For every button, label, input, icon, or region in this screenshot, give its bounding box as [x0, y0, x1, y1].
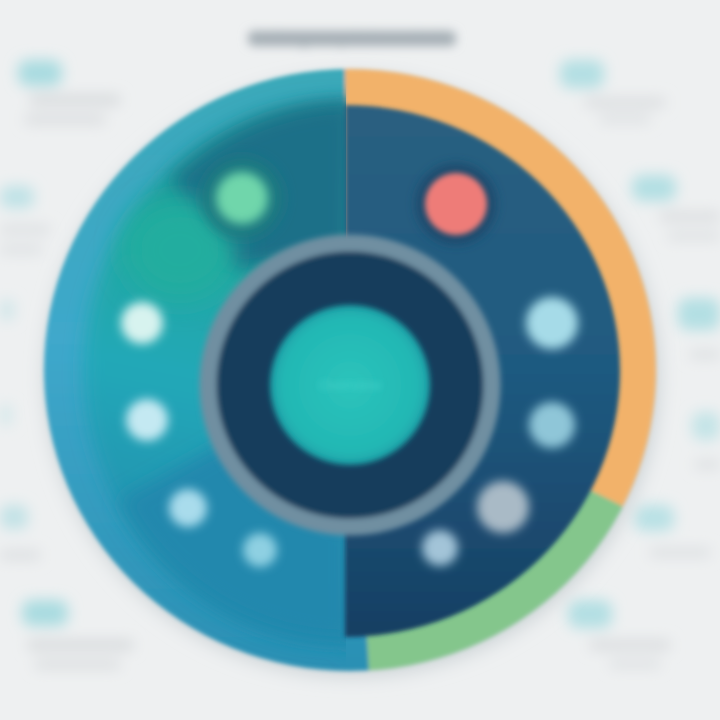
- label: mid left: [0, 300, 14, 425]
- label: bottom left: [22, 600, 133, 669]
- green glow wedge: [160, 188, 248, 270]
- icon: white dot left 1: [121, 302, 163, 344]
- outer orange arc: [340, 66, 660, 509]
- inner right navy half: [345, 105, 620, 637]
- main donut chart: [38, 65, 666, 682]
- label: lower left: [0, 505, 40, 560]
- label: bottom right: [568, 600, 670, 668]
- icon: light dot right 1: [526, 297, 578, 349]
- label: top right: [560, 60, 665, 123]
- dark upper left wedge: [172, 105, 350, 270]
- icon: white dot left 4: [243, 533, 277, 567]
- icon: grey dot right 3: [477, 481, 529, 533]
- label: mid right lower: [692, 412, 720, 469]
- center label: Overview: [319, 377, 381, 394]
- label: lower right: [634, 505, 710, 557]
- label: mid left upper: [0, 186, 50, 254]
- right side labels: [560, 60, 720, 668]
- icon: white dot left 3: [169, 489, 207, 527]
- icon: light dot right 2: [529, 402, 575, 448]
- label: upper right: [632, 175, 720, 240]
- segment icons: [121, 158, 578, 567]
- label: top left: [18, 60, 120, 124]
- shadow: [44, 75, 660, 677]
- icon: red dot: [416, 164, 496, 244]
- label: mid right: [678, 298, 720, 359]
- center disc: [270, 305, 430, 465]
- center ring: [208, 243, 492, 527]
- title: Infographic Title: [250, 28, 454, 48]
- icon: light dot right 4: [422, 530, 458, 566]
- inner left teal half: [78, 85, 346, 654]
- icon: green dot: [202, 158, 282, 238]
- left side labels: [0, 60, 133, 669]
- outer green arc: [363, 489, 624, 674]
- outer ring and wedges: [40, 66, 659, 674]
- blue wedge bottom left: [128, 448, 344, 586]
- icon: white dot left 2: [126, 399, 168, 441]
- outer left ring: [40, 66, 372, 674]
